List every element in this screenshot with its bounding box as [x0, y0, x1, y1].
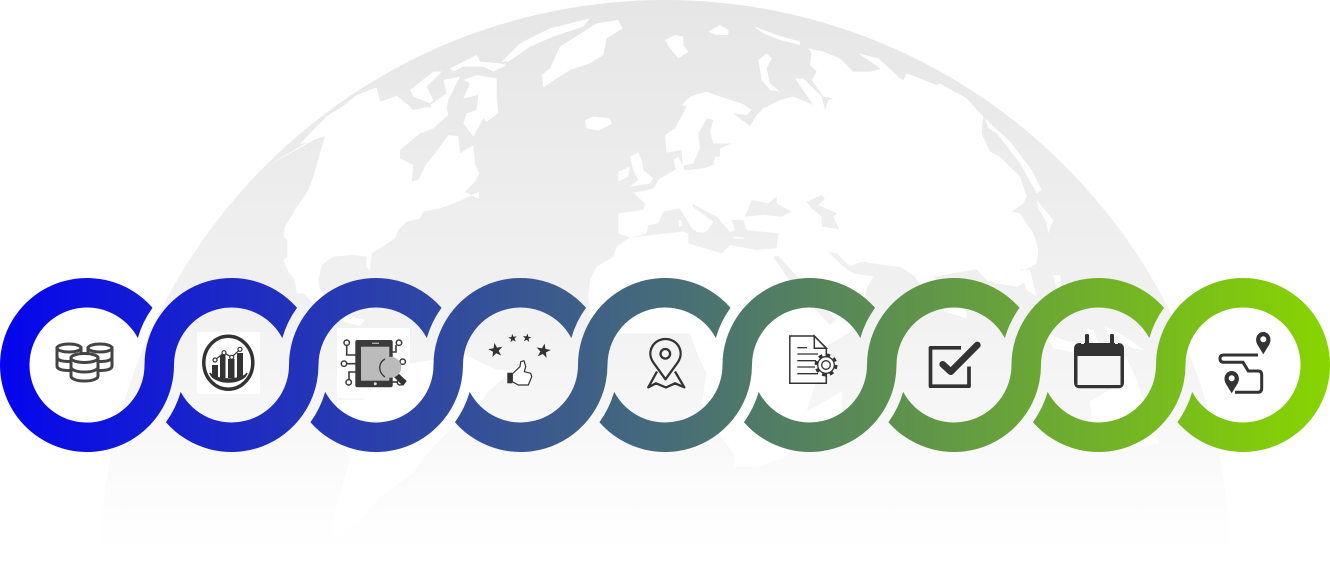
icon: map pin on folded map [648, 339, 684, 388]
icon: calendar [1074, 334, 1124, 388]
icon: tablet with circuit lines and magnifier [341, 340, 407, 387]
ring band 2 to 3 [166, 278, 442, 452]
icon: document with gear [790, 336, 836, 383]
ring band 4 to 5 [455, 278, 731, 452]
continents: Central America [295, 280, 365, 326]
icon backing squares [197, 328, 410, 398]
continents: North America and Arctic Canada [263, 18, 623, 293]
icon: analytics chart in circle [204, 336, 253, 389]
ring band 8 to 9 [1033, 278, 1330, 452]
ring band 6 to 7 [744, 278, 1020, 452]
linked ring chain [0, 278, 1330, 452]
icon: stars and thumbs up [487, 333, 552, 385]
ring band 1 to 2 [0, 278, 297, 452]
ring band 5 to 6 [599, 278, 875, 452]
continents: South-East Asia and Australia [910, 268, 1160, 447]
icon: route between two pins [1220, 332, 1271, 393]
ring band 7 to 8 [888, 278, 1164, 452]
icon: checked checkbox [930, 345, 977, 386]
continents: Eurasia, Africa and islands [585, 25, 1053, 467]
ring band 3 to 4 [310, 278, 586, 452]
continents: South America [330, 355, 513, 537]
icon: database cylinders [57, 344, 112, 381]
